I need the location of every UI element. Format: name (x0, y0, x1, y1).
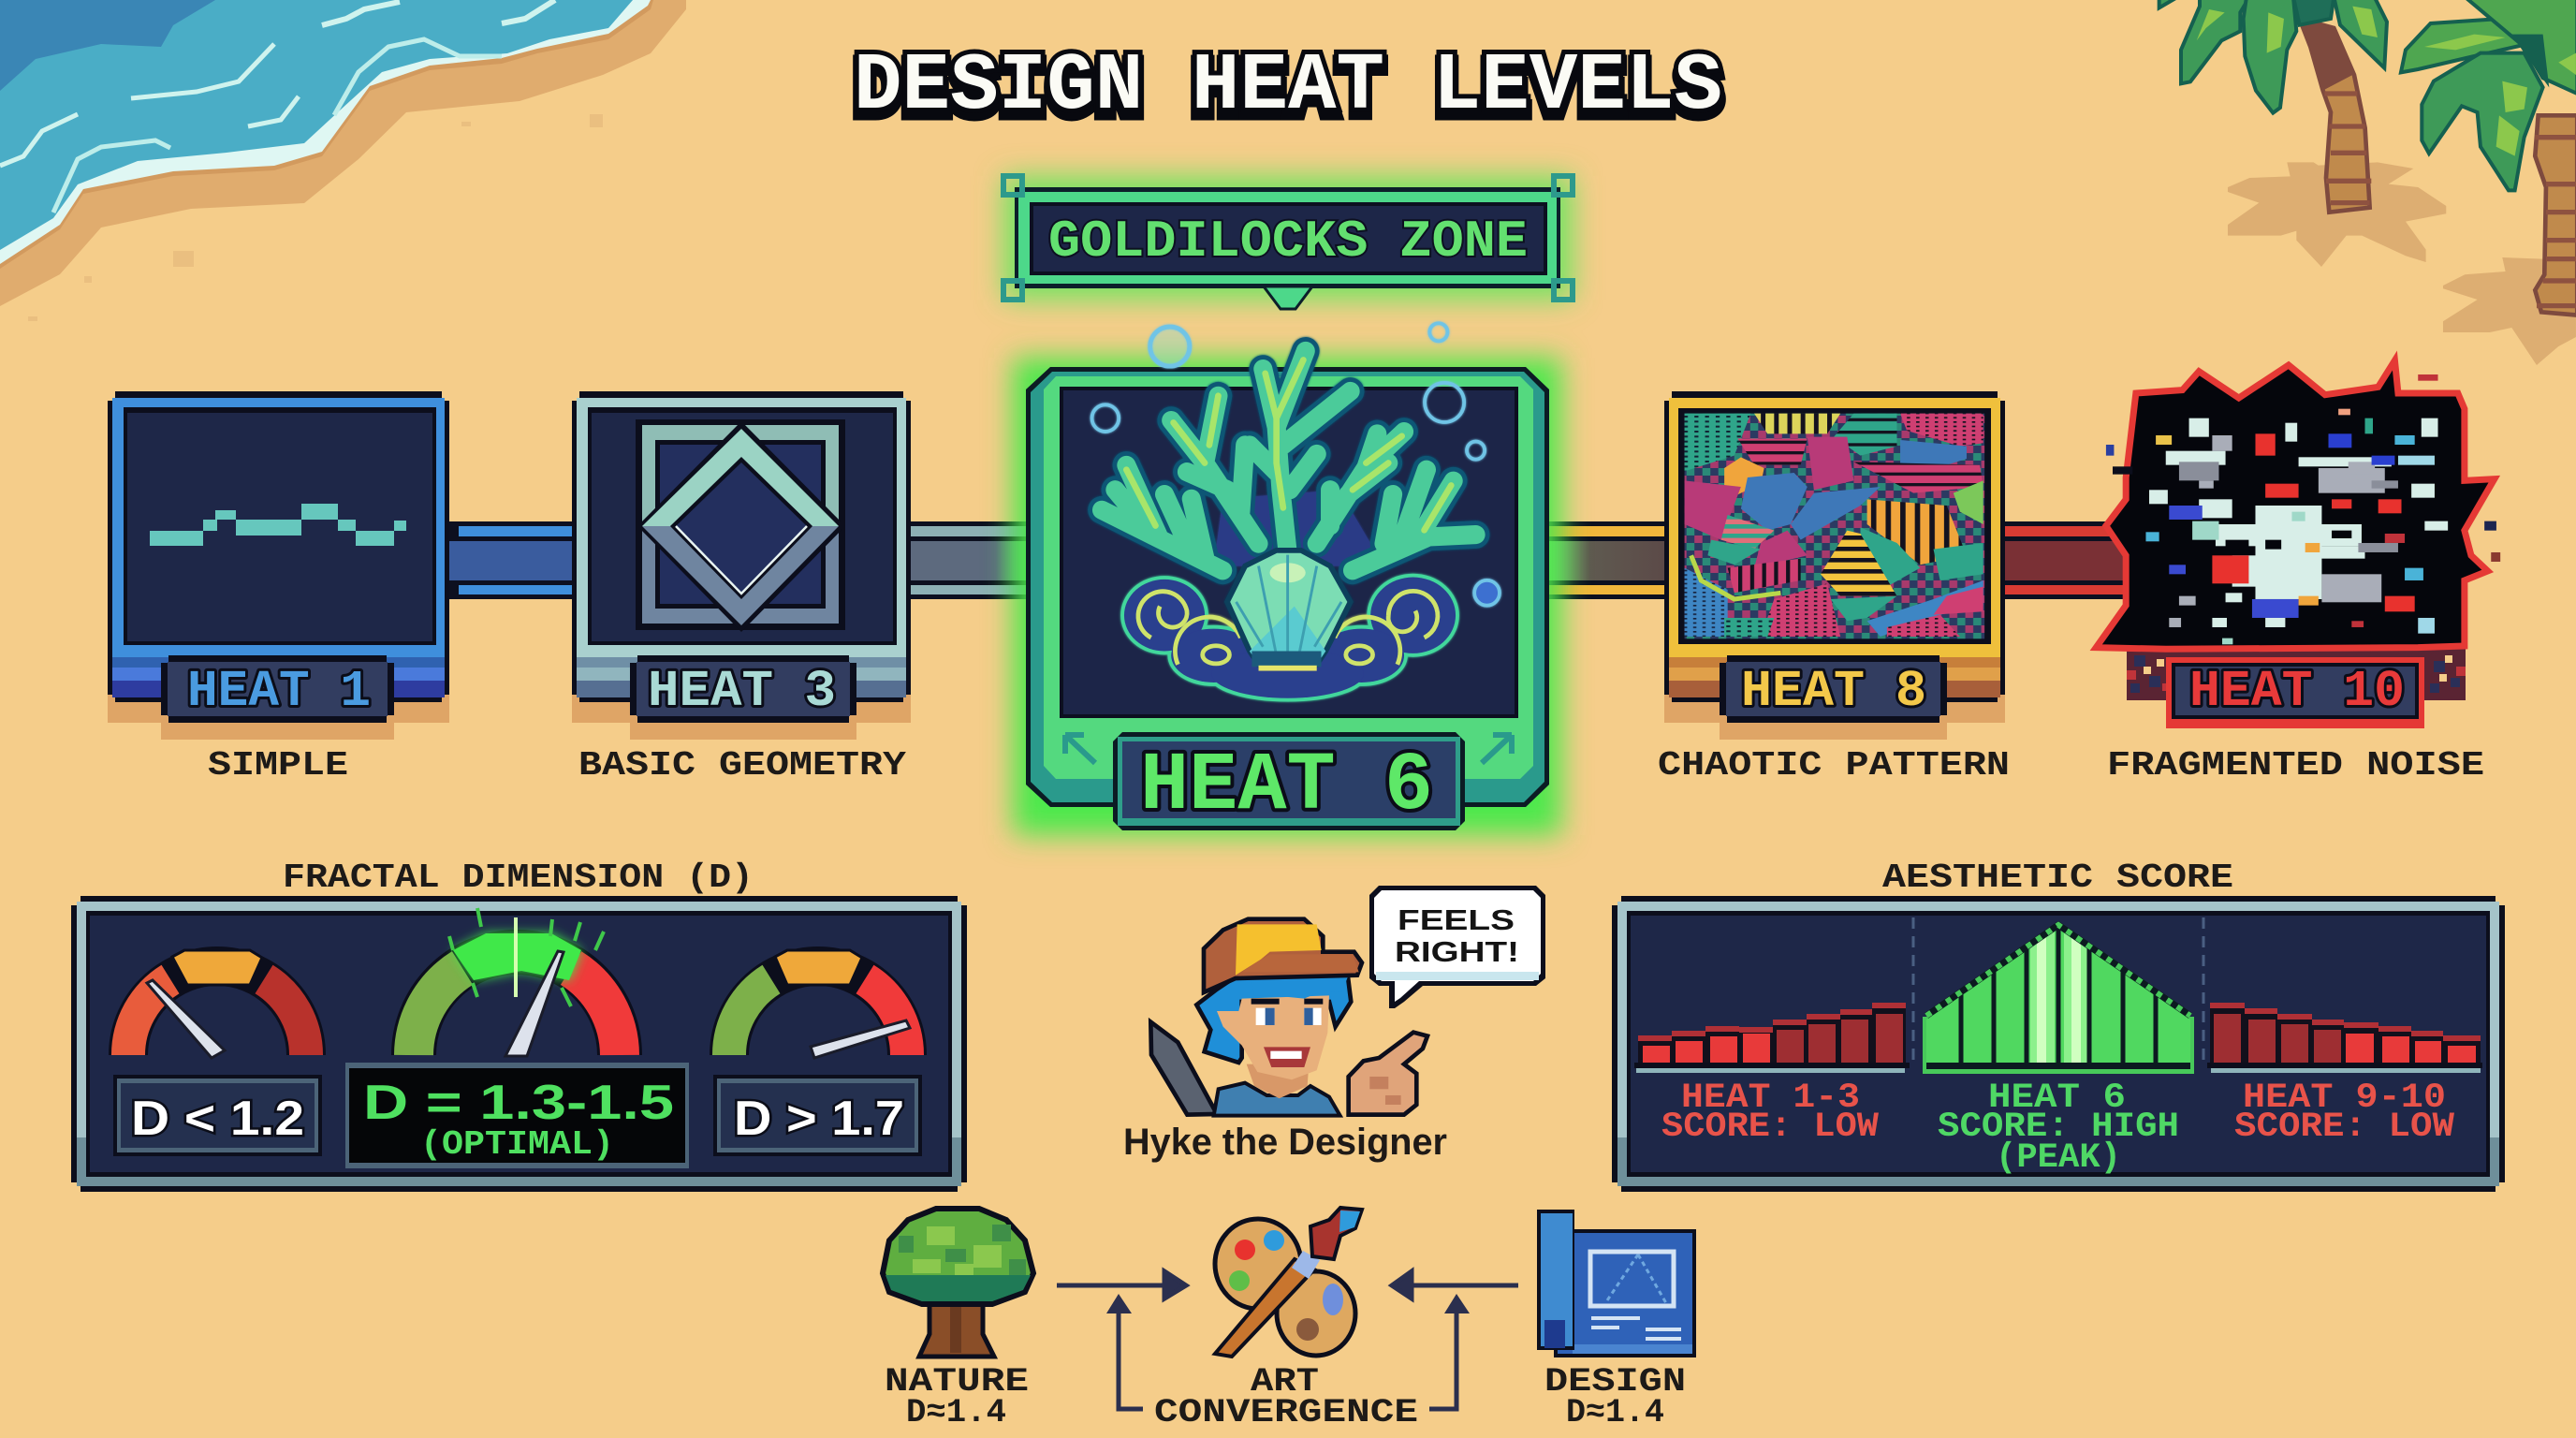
noise burst (2106, 374, 2500, 644)
trunk rings left (2324, 94, 2371, 203)
icon: palette and brush (1215, 1208, 1362, 1357)
label: nature: NATURE (885, 1363, 1029, 1401)
shirt (1214, 1083, 1340, 1116)
speckled lower tier (2127, 646, 2466, 700)
convergence diagram (883, 1208, 1696, 1431)
score text: peak: HEAT 6 (1988, 1078, 2126, 1118)
speech bubble: FEELS (1398, 903, 1515, 936)
chaotic pattern artwork (1685, 414, 1984, 638)
label: art convergence: ART (1251, 1363, 1319, 1401)
cap crown (1204, 919, 1362, 992)
card: heat 8 (1658, 391, 2010, 785)
score text: low right (2234, 1078, 2455, 1147)
name label: Hyke the Designer (1123, 1122, 1447, 1163)
palm shadow right (2443, 257, 2576, 365)
icon: square and diamond (636, 419, 845, 632)
readout: d above 1.7: D > 1.7 (734, 1092, 904, 1146)
gauge: high (729, 950, 910, 1058)
cap brim (1242, 954, 1359, 972)
gauge: optimal (414, 908, 620, 1056)
connector heat 8 to heat 10 (2005, 521, 2127, 599)
connector heat 6 to heat 8 (1549, 521, 1664, 599)
readout: d below 1.2: D < 1.2 (131, 1092, 304, 1146)
badge: heat 1: HEAT 1 (187, 662, 371, 721)
coral outline (1102, 351, 1476, 570)
palm fronds left (2159, 0, 2387, 113)
score text: low right: SCORE: LOW (2234, 1108, 2455, 1147)
bubbles (1092, 323, 1500, 606)
shell (1227, 550, 1351, 671)
pencil (1150, 1022, 1217, 1115)
hand (1349, 1033, 1427, 1115)
spirals (1138, 591, 1438, 665)
label: nature (885, 1363, 1029, 1431)
card: heat 10 (2096, 360, 2500, 785)
card: heat 3 (572, 391, 911, 785)
arrow: nature to art (1057, 1271, 1186, 1299)
bars: heat 9-10 (2207, 1003, 2482, 1073)
trunk rings right (2535, 138, 2576, 306)
beach: ocean and shoreline (0, 0, 686, 321)
goldilocks zone banner: GOLDILOCKS ZONE (1048, 212, 1528, 271)
arrow: right feedback (1429, 1294, 1470, 1409)
label: art convergence (1154, 1363, 1418, 1431)
palm trunk right (2535, 115, 2576, 315)
card: heat 1 (108, 391, 449, 785)
badge: heat 1 (161, 655, 394, 723)
banner corner ornaments (1003, 176, 1573, 300)
bars: heat 1-3 (1634, 1003, 1910, 1073)
readout: d above 1.7 (713, 1075, 922, 1156)
score text: peak: (PEAK) (1996, 1138, 2121, 1178)
label: simple: SIMPLE (208, 746, 348, 785)
reef lobes outline (1124, 578, 1456, 698)
fringe (1251, 976, 1348, 999)
speech bubble (1369, 886, 1545, 1008)
jagged frame (2096, 360, 2500, 649)
cap front (1236, 924, 1322, 976)
readout: optimal (345, 1063, 689, 1168)
reef lobes fill (1124, 578, 1456, 698)
coral body (1102, 351, 1476, 570)
frond highlights left (2197, 7, 2378, 53)
speech bubble: RIGHT! (1395, 935, 1519, 968)
palm trees (2159, 0, 2576, 365)
palm trunk left (2300, 19, 2370, 213)
label: chaotic pattern: CHAOTIC PATTERN (1658, 746, 2010, 785)
heading: aesthetic score: AESTHETIC SCORE (1882, 858, 2233, 897)
label: design (1544, 1363, 1686, 1431)
palm shadow left (2228, 162, 2446, 267)
frond highlights right (2424, 35, 2576, 156)
score text: low left: HEAT 1-3 (1681, 1078, 1860, 1118)
icon: tree (883, 1209, 1033, 1357)
title: DESIGN HEAT LEVELS (854, 47, 1722, 139)
label: art convergence: CONVERGENCE (1154, 1394, 1418, 1431)
trunk shading left (2300, 19, 2352, 91)
label: basic geometry: BASIC GEOMETRY (578, 746, 906, 785)
label: design: D≈1.4 (1566, 1394, 1664, 1431)
bars: heat 6 peak (1923, 917, 2194, 1074)
coral highlight (1126, 360, 1451, 530)
coral and shell artwork (1092, 323, 1500, 698)
mouth (1264, 1047, 1310, 1067)
panel: aesthetic score (1612, 896, 2505, 1192)
hair back (1196, 976, 1351, 1063)
arrow: design to art (1392, 1271, 1518, 1299)
badge: heat 10: HEAT 10 (2189, 662, 2405, 721)
label: fragmented noise: FRAGMENTED NOISE (2107, 746, 2484, 785)
icon: simple wave (150, 504, 406, 546)
arrow: left feedback (1106, 1294, 1143, 1409)
goldilocks zone banner (1003, 176, 1573, 309)
character: hyke the designer (1123, 886, 1545, 1163)
palm fronds right (2401, 0, 2576, 190)
label: nature: D≈1.4 (906, 1394, 1006, 1431)
connector heat 1 to heat 3 (449, 521, 572, 599)
frond centre (2511, 35, 2549, 87)
panel: fractal dimension gauges (71, 896, 967, 1192)
title: DESIGN HEAT LEVELS (854, 40, 1722, 132)
face (1217, 995, 1329, 1079)
score text: low left (1661, 1078, 1880, 1147)
badge: heat 8: HEAT 8 (1741, 662, 1926, 721)
frame corner arrows (1065, 735, 1512, 763)
card: heat 6 (1026, 323, 1549, 833)
score text: peak (1938, 1078, 2179, 1178)
readout: optimal: (OPTIMAL) (420, 1125, 614, 1164)
score text: peak: SCORE: HIGH (1938, 1108, 2179, 1147)
badge: heat 6: HEAT 6 (1140, 741, 1433, 833)
connector heat 3 to heat 6 (911, 521, 1032, 599)
icon: blueprint (1537, 1210, 1696, 1357)
neck (1247, 1064, 1309, 1098)
badge: heat 10 (2166, 657, 2424, 728)
readout: optimal: D = 1.3-1.5 (363, 1076, 674, 1130)
green glow (1003, 176, 1573, 835)
eyes (1251, 999, 1323, 1025)
banner pointer (1264, 286, 1312, 309)
score text: low right: HEAT 9-10 (2243, 1078, 2446, 1118)
score text: low left: SCORE: LOW (1661, 1108, 1880, 1147)
heading: fractal dimension: FRACTAL DIMENSION (D) (283, 858, 754, 897)
readout: d below 1.2 (113, 1075, 322, 1156)
coral shadow patches (1214, 490, 1383, 566)
gauge: low (128, 950, 306, 1058)
badge: heat 3: HEAT 3 (648, 662, 836, 721)
label: design: DESIGN (1544, 1363, 1686, 1401)
